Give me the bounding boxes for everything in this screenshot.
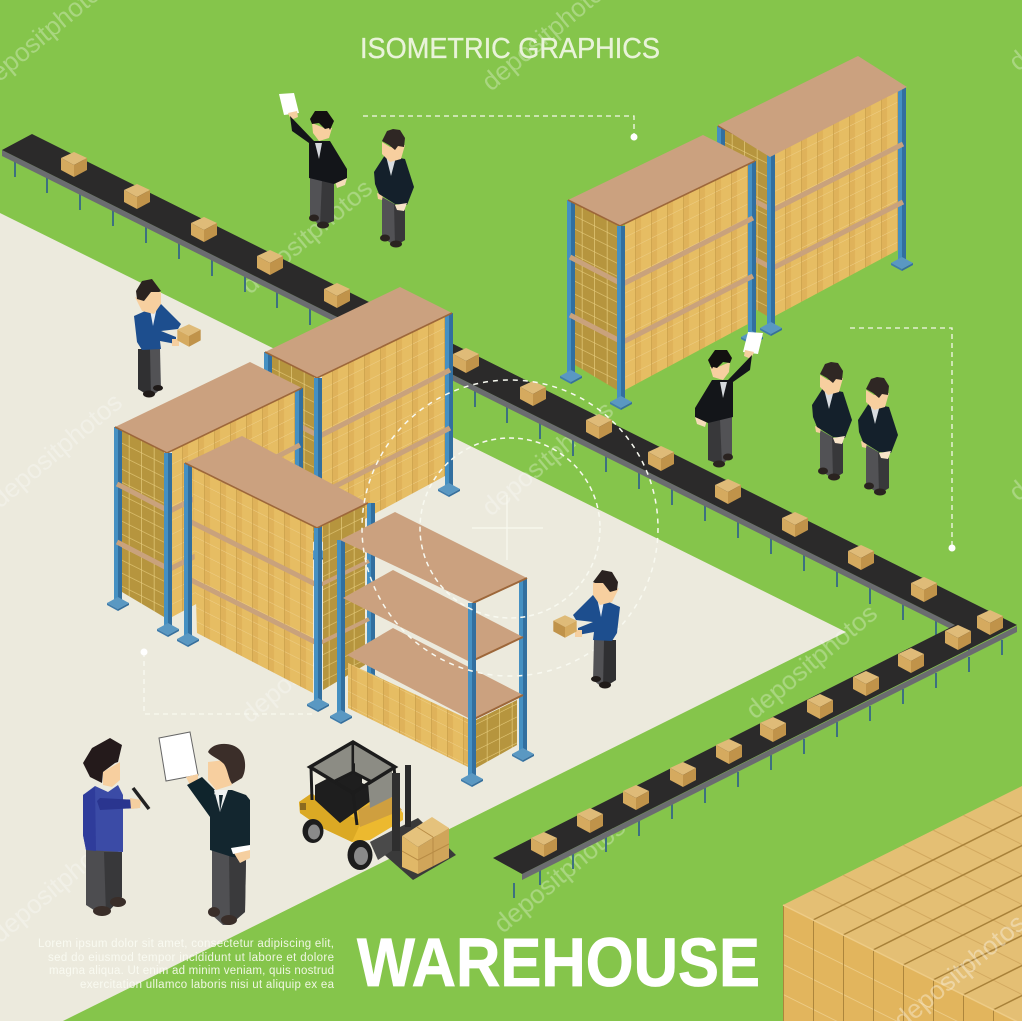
watermark: depositphotos [740, 598, 883, 725]
watermark: depositphotos [488, 812, 631, 939]
forklift cargo [402, 817, 449, 874]
cage [310, 742, 398, 825]
dashed callout left [140, 648, 315, 714]
stacked boxes pallet [783, 786, 1022, 1023]
yellow body [299, 793, 403, 842]
shelf bottom [347, 628, 523, 720]
dashed callout right [850, 328, 956, 552]
rack far right top [718, 56, 907, 157]
rack centre back [257, 287, 460, 562]
open shelf rack [330, 512, 534, 787]
rack centre front [177, 436, 382, 712]
conveyor belt lower [493, 625, 1017, 898]
watermark: depositphotos [740, 173, 883, 300]
wheels [302, 819, 324, 843]
worker carrying box, centre [553, 570, 620, 688]
person standing, right 1 [812, 362, 852, 480]
main heading: WAREHOUSE [357, 924, 760, 1001]
manager with clipboard [159, 732, 250, 925]
seat [315, 762, 382, 823]
shelf middle [343, 570, 523, 662]
bottom white strip [0, 1021, 1022, 1023]
rack far right [710, 56, 913, 336]
lorem text block: magna aliqua. Ut enim ad minim veniam, quis nostrud [49, 965, 334, 977]
person standing, top [374, 129, 414, 248]
rack left [107, 362, 310, 637]
watermark: depositphotos [235, 602, 378, 729]
person standing, right 2 [858, 377, 898, 496]
shelf top [340, 512, 527, 603]
dashed target circles [362, 380, 658, 676]
lorem text block: sed do eiusmod tempor incididunt ut labore et dolore [48, 952, 334, 964]
boxes on conveyor [61, 152, 1003, 857]
lorem text block: Lorem ipsum dolor sit amet, consectetur adipiscing elit, [38, 938, 334, 950]
title: ISOMETRIC GRAPHICS [360, 33, 660, 65]
forklift [299, 742, 456, 880]
person raising paper, right [695, 332, 763, 468]
fork plate [370, 818, 456, 880]
mast [392, 765, 411, 851]
watermark: depositphotos [476, 395, 619, 522]
conveyor belt upper [2, 134, 1017, 653]
worker carrying box, upper left [134, 279, 201, 398]
watermark: depositphotos [235, 173, 378, 300]
rack upper middle [560, 135, 763, 410]
lorem text block [38, 938, 335, 991]
dashed callout top [363, 116, 638, 140]
person raising paper, top [279, 93, 347, 228]
warehouse floor [0, 213, 846, 1021]
worker with pen [83, 738, 149, 916]
lorem text block: exercitation ullamco laboris nisi ut aliquip ex ea [80, 979, 335, 991]
